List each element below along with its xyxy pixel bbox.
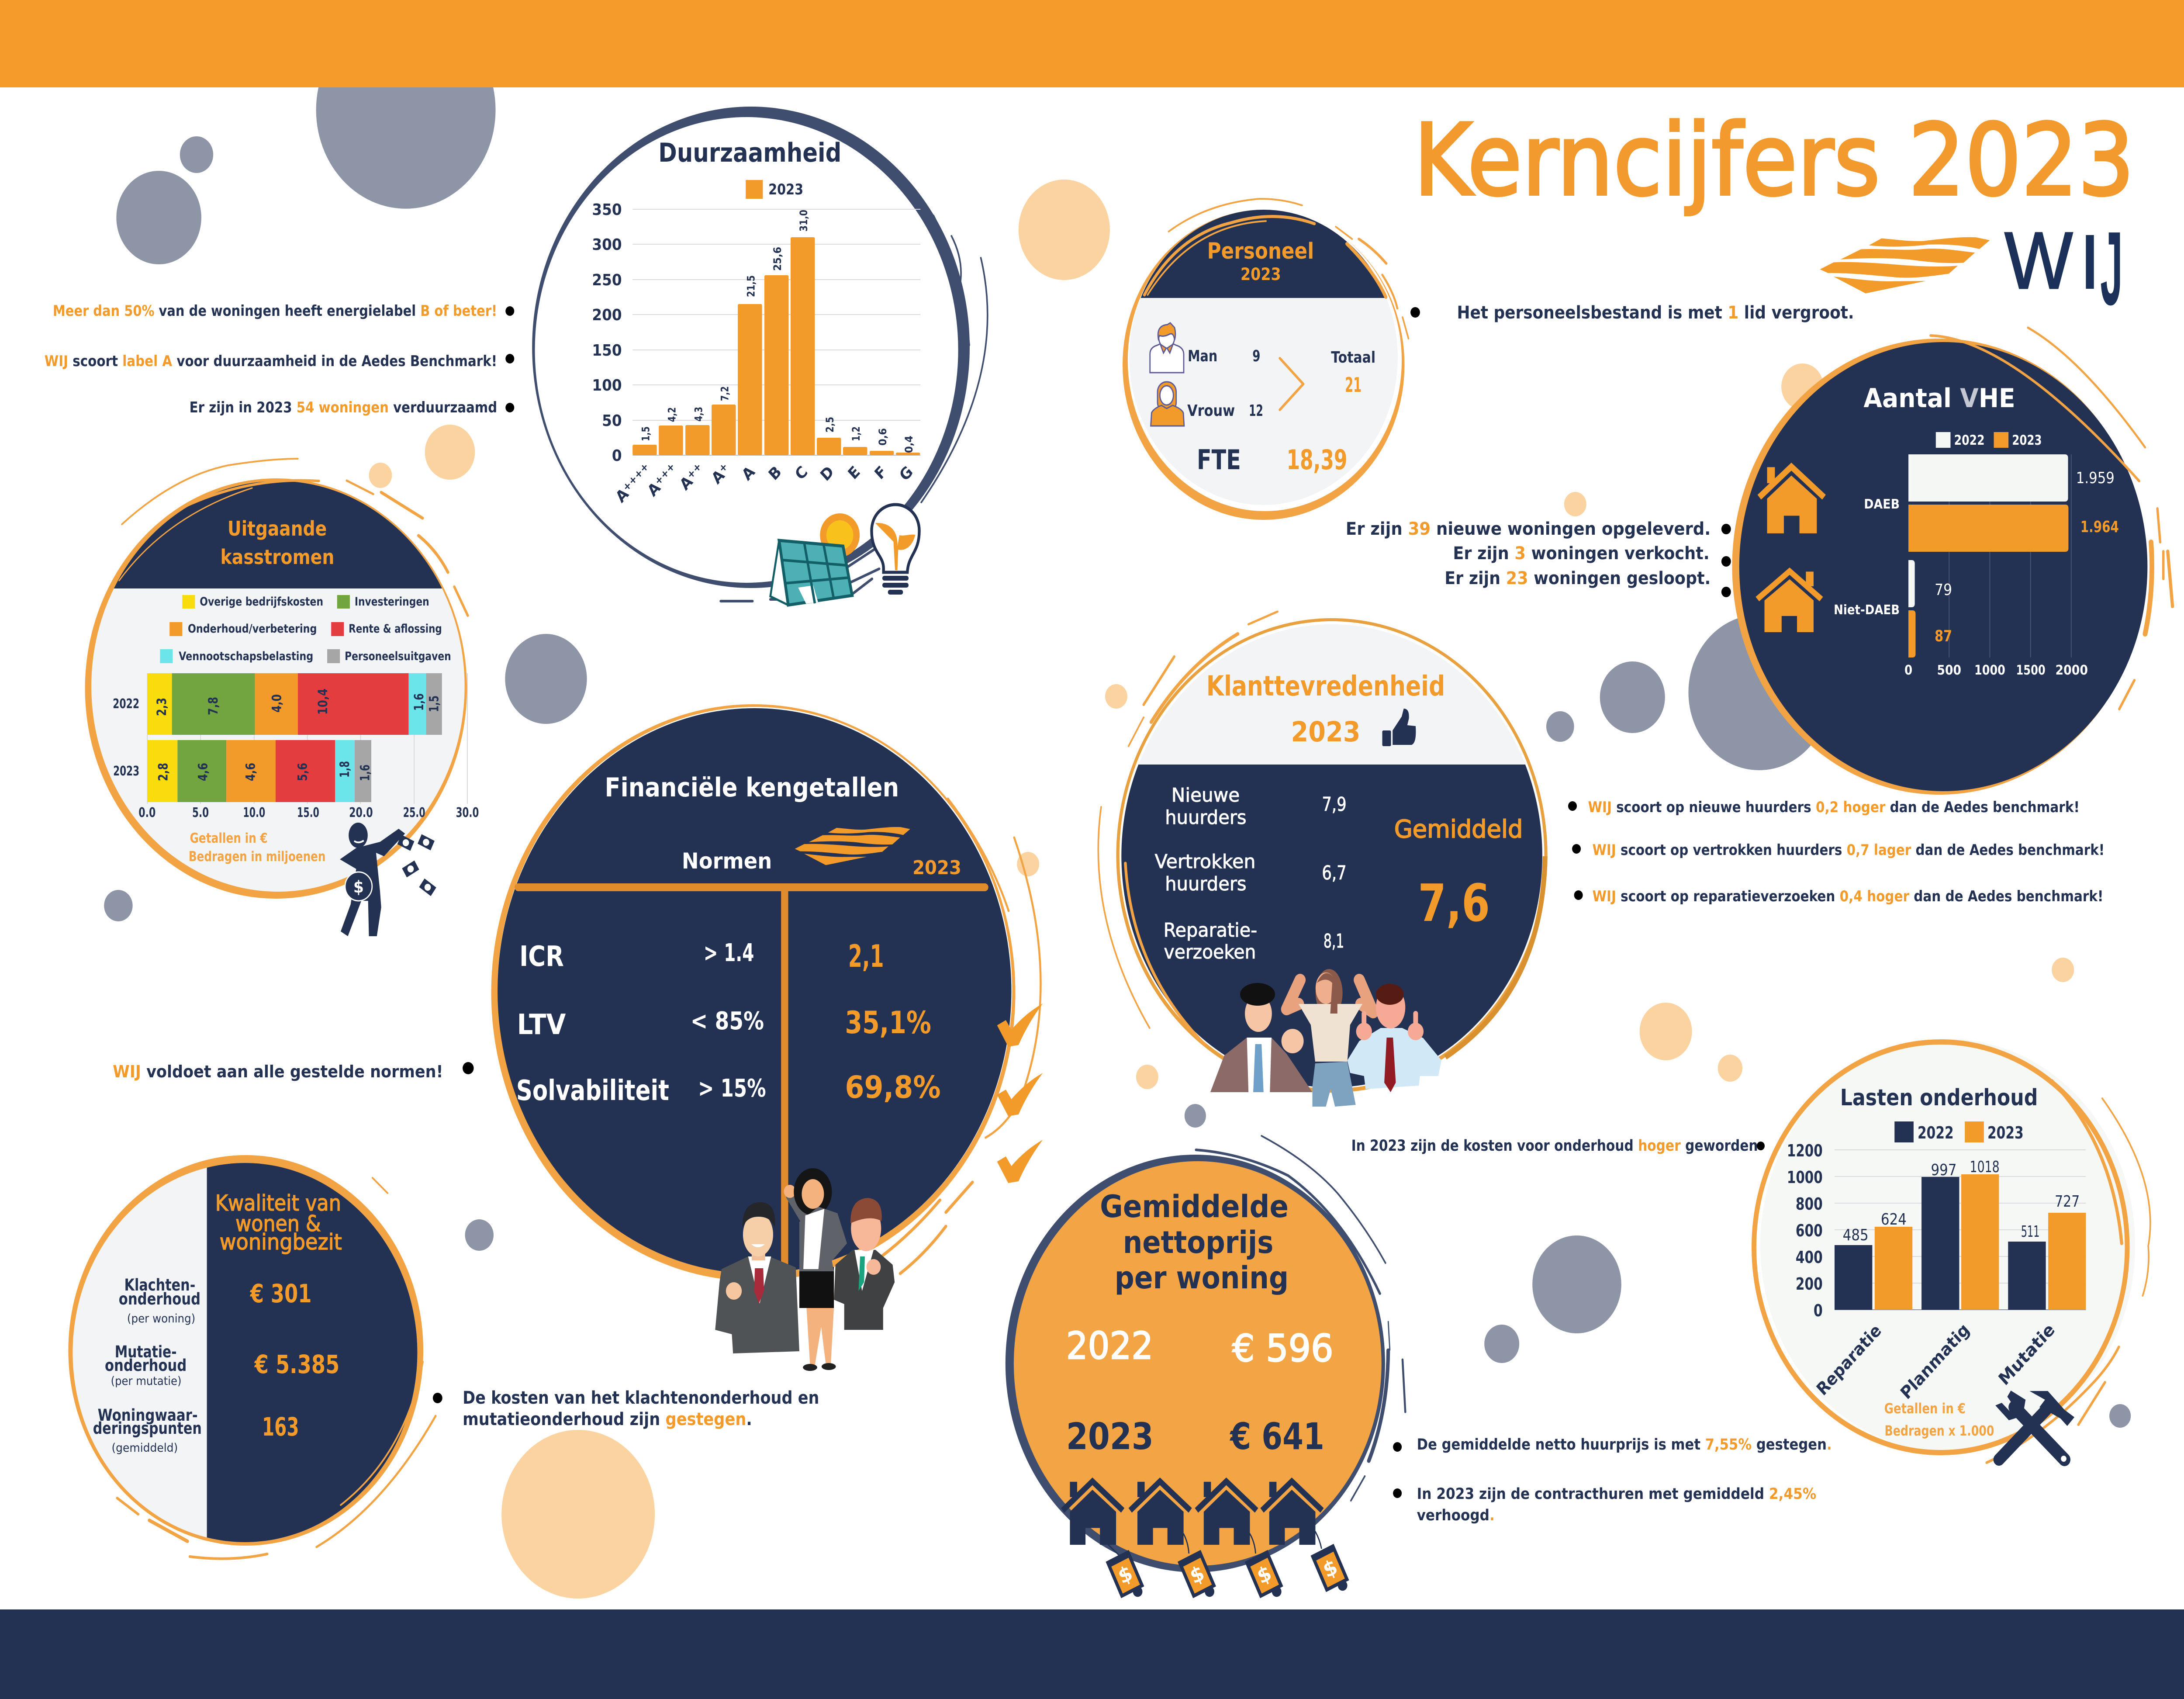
note: units: Bedragen x 1.000 — [1885, 1423, 1994, 1439]
text block: normen: WIJ voldoet aan alle gestelde normen! — [113, 1062, 443, 1081]
heading: Gemiddelde nettoprijs per woning — [1100, 1189, 1289, 1296]
bar chart: energielabels: 300 — [592, 236, 622, 254]
row: mutatieonderhoud — [105, 1343, 339, 1388]
scores table: huurders — [1165, 872, 1247, 895]
icon: solar panel with sun — [771, 513, 860, 605]
legend: 2023 — [1987, 1123, 2024, 1142]
heading: Klanttevredenheid 2023: Klanttevredenheid — [1206, 670, 1445, 702]
icon: house DAEB — [1758, 463, 1826, 533]
bar chart: lasten onderhoud: 1000 — [1787, 1167, 1823, 1187]
note: units: Getallen in € — [1884, 1401, 1966, 1417]
text block: huurprijs: In 2023 zijn de contracthuren met gemiddeld 2,45% — [1417, 1485, 1816, 1502]
stacked bar chart: 10.0 — [243, 805, 265, 820]
bar chart: lasten onderhoud: 485 — [1843, 1226, 1869, 1244]
icon: wrench and hammer — [1995, 1391, 2074, 1462]
bar chart: energielabels: A — [739, 463, 758, 484]
bar chart: energielabels: 21,5 — [745, 275, 757, 297]
text block: onderhoudskosten — [433, 1388, 819, 1429]
heading: Kwaliteit van wonen en woningbezit: Kwaliteit van — [215, 1191, 341, 1216]
panel: Uitgaande kasstromen — [79, 459, 479, 936]
row: klachtenonderhoud — [119, 1276, 312, 1325]
icon: person throwing money — [340, 823, 436, 936]
title: Kerncijfers 2023 — [1413, 103, 2134, 218]
FTE figure: FTE — [1197, 444, 1241, 476]
stacked bar chart: 1,5 — [427, 696, 442, 712]
panel: Financiële kengetallen — [491, 704, 1043, 1371]
bar chart: lasten onderhoud: 511 — [2021, 1223, 2040, 1241]
bar chart: VHE: 500 — [1937, 662, 1961, 678]
text block: personeel: Het personeelsbestand is met 1 lid vergroot. — [1457, 303, 1854, 323]
row: ICR: ICR — [519, 940, 564, 973]
stacked bar chart: 0.0 — [138, 805, 156, 820]
text block: klanttevredenheid — [1568, 799, 2105, 905]
row: klachtenonderhoud: € 301 — [249, 1280, 312, 1309]
bar chart: energielabels: A — [612, 485, 632, 506]
scores table — [1155, 784, 1347, 963]
WIJ logo — [1820, 214, 2122, 324]
legend — [1894, 1121, 2024, 1142]
staff counts — [1187, 347, 1375, 420]
text block: lasten onderhoud: In 2023 zijn de kosten voor onderhoud hoger geworden — [1351, 1137, 1758, 1154]
row: 2022: 2022 — [1066, 1325, 1153, 1368]
icon: houses with price tags: $ — [1254, 1560, 1275, 1589]
bar chart: lasten onderhoud: 0 — [1814, 1301, 1823, 1320]
bar chart: energielabels: F — [871, 463, 890, 483]
heading: Uitgaande kasstromen — [221, 517, 334, 569]
scores table: huurders — [1165, 806, 1247, 828]
row: LTV: < 85% — [691, 1007, 764, 1035]
bar chart: energielabels: 1,5 — [639, 426, 652, 441]
bar chart: energielabels: 31,0 — [798, 210, 810, 232]
bar chart: energielabels: A — [708, 466, 728, 488]
bar chart: energielabels: 2,5 — [824, 417, 836, 433]
text block: woningen: Er zijn 39 nieuwe woningen opgeleverd. — [1346, 519, 1711, 539]
row: woningwaarderingspunten — [93, 1406, 299, 1455]
staff counts: Man — [1188, 347, 1217, 365]
stacked bar chart: 7,8 — [206, 697, 221, 715]
scores table: 7,9 — [1322, 793, 1347, 815]
row: 2023: € 641 — [1230, 1415, 1324, 1458]
bar chart: energielabels: +++ — [653, 460, 677, 488]
total 21: 21 — [1345, 374, 1362, 397]
bar chart: energielabels — [592, 201, 920, 506]
stacked bar chart: 2022 — [113, 696, 139, 711]
row: woningwaarderingspunten: 163 — [262, 1413, 299, 1442]
note: units: Bedragen in miljoenen — [189, 849, 325, 864]
legend: Overige bedrijfskosten — [200, 595, 323, 609]
heading: Kwaliteit van wonen en woningbezit: wonen & — [235, 1211, 321, 1237]
bar chart: lasten onderhoud: 727 — [2055, 1193, 2080, 1211]
bar chart: lasten onderhoud: Mutatie — [1995, 1320, 2059, 1390]
bar chart: lasten onderhoud: Reparatie — [1813, 1321, 1885, 1400]
row: 2022 — [1066, 1325, 1334, 1370]
panel: Klanttevredenheid — [1098, 612, 1553, 1107]
heading: Kwaliteit van wonen en woningbezit — [215, 1191, 342, 1255]
row: Solvabiliteit — [516, 1069, 941, 1107]
bar chart: energielabels: 250 — [592, 271, 622, 289]
row: LTV: 35,1% — [845, 1005, 931, 1041]
icon: houses with price tags: $ — [1319, 1554, 1341, 1583]
table header: Normen — [682, 849, 772, 874]
stacked bar chart: 1,6 — [412, 693, 427, 711]
icon: woman — [1151, 382, 1184, 426]
bar chart: lasten onderhoud: 400 — [1796, 1247, 1823, 1267]
bar chart: VHE: 1500 — [2016, 662, 2046, 678]
staff counts: 12 — [1249, 402, 1263, 420]
text block: duurzaamheid: Meer dan 50% van de woningen heeft energielabel B of beter! — [53, 302, 497, 319]
staff counts: 9 — [1252, 347, 1260, 365]
text block: klanttevredenheid: WIJ scoort op reparatieverzoeken 0,4 hoger dan de Aedes benchmark! — [1592, 888, 2103, 905]
note: units: Getallen in € — [190, 830, 268, 846]
note: units — [189, 830, 325, 864]
stacked bar chart: 1,6 — [358, 765, 373, 781]
row: mutatieonderhoud: (per mutatie) — [111, 1374, 181, 1388]
row: mutatieonderhoud: € 5.385 — [254, 1350, 339, 1380]
heading: Personeel 2023 — [1207, 239, 1314, 284]
row: Solvabiliteit: 69,8% — [845, 1069, 941, 1105]
row: LTV — [517, 1005, 931, 1041]
scores table: 6,7 — [1322, 862, 1347, 884]
WIJ logo: W — [2004, 216, 2073, 306]
bar chart: lasten onderhoud: 200 — [1796, 1274, 1823, 1294]
text block: duurzaamheid — [45, 302, 514, 416]
heading: Financiële kengetallen: Financiële kengetallen — [605, 772, 899, 803]
table header: 2023 — [912, 856, 961, 879]
WIJ logo: I — [2080, 220, 2099, 305]
row: mutatieonderhoud: Mutatie- — [115, 1343, 177, 1361]
bar chart: lasten onderhoud: 1200 — [1787, 1141, 1823, 1160]
panel: Aantal VHE — [1732, 328, 2173, 795]
bar chart: lasten onderhoud: 800 — [1796, 1194, 1823, 1214]
top banner — [0, 0, 2184, 87]
icon: house Niet-DAEB — [1755, 567, 1823, 632]
stacked bar chart: 1,8 — [338, 761, 352, 778]
bar chart: VHE: DAEB — [1864, 496, 1900, 512]
text block: klanttevredenheid: WIJ scoort op vertrokken huurders 0,7 lager dan de Aedes benchmark! — [1592, 841, 2105, 858]
legend: Personeelsuitgaven — [345, 650, 451, 663]
heading: Lasten onderhoud: Lasten onderhoud — [1840, 1084, 2038, 1111]
legend — [1936, 432, 2042, 448]
stacked bar chart: 5.0 — [192, 805, 209, 820]
bar chart: energielabels: 1,2 — [850, 426, 862, 441]
stacked bar chart: 2023 — [113, 763, 139, 779]
table header — [682, 827, 961, 879]
bar chart: energielabels: 0,6 — [877, 428, 889, 446]
row: mutatieonderhoud: onderhoud — [105, 1356, 187, 1375]
bar chart: VHE: 2000 — [2055, 662, 2088, 678]
row: 2023: 2023 — [1066, 1415, 1154, 1458]
bar chart: energielabels: 4,2 — [666, 407, 678, 422]
stacked bar chart: 2,3 — [155, 698, 169, 716]
stacked bar chart: 10,4 — [316, 689, 331, 715]
legend: Rente & aflossing — [349, 622, 442, 636]
heading: Aantal VHE: Aantal VHE — [1863, 383, 2015, 414]
bar chart: energielabels: + — [717, 460, 730, 475]
scores table: Vertrokken — [1155, 850, 1256, 872]
heading: Gemiddelde nettoprijs per woning: nettoprijs — [1123, 1225, 1273, 1260]
row: klachtenonderhoud: onderhoud — [119, 1290, 200, 1308]
heading: Klanttevredenheid 2023 — [1206, 670, 1445, 748]
scores table: Reparatie- — [1164, 919, 1257, 941]
heading: Uitgaande kasstromen: kasstromen — [221, 546, 334, 569]
bar chart: energielabels: D — [817, 463, 837, 485]
FTE figure: 18,39 — [1286, 444, 1348, 476]
bar chart: VHE: Niet-DAEB — [1834, 602, 1900, 617]
scores table: Nieuwe — [1171, 784, 1240, 806]
row: klachtenonderhoud: (per woning) — [127, 1312, 195, 1325]
heading: Personeel 2023: 2023 — [1241, 264, 1281, 284]
legend — [746, 180, 803, 199]
bar chart: energielabels: ++ — [685, 460, 704, 481]
text block: onderhoudskosten: mutatieonderhoud zijn gestegen. — [463, 1409, 752, 1429]
bar chart: energielabels: E — [845, 463, 864, 483]
stacked bar chart — [113, 673, 479, 820]
stacked bar chart: 30.0 — [456, 805, 479, 820]
panel: Gemiddelde nettoprijs per woning — [1006, 1136, 1405, 1605]
stacked bar chart: 15.0 — [297, 805, 319, 820]
row: ICR — [519, 938, 884, 974]
legend: 2023 — [2012, 433, 2042, 448]
bar chart: VHE: 79 — [1935, 581, 1952, 599]
row: Solvabiliteit: Solvabiliteit — [516, 1074, 669, 1107]
text block: woningen: Er zijn 3 woningen verkocht. — [1453, 543, 1710, 564]
legend — [160, 595, 451, 663]
average score: 7,6 — [1418, 873, 1490, 933]
bar chart: lasten onderhoud: Planmatig — [1897, 1320, 1973, 1403]
bar chart: energielabels: 50 — [602, 412, 622, 430]
bar chart: lasten onderhoud: 997 — [1931, 1161, 1957, 1179]
bar chart: energielabels: A — [677, 472, 696, 494]
text block: huurprijs: verhoogd. — [1417, 1506, 1495, 1524]
text block: huurprijs — [1393, 1436, 1832, 1524]
text block: duurzaamheid: WIJ scoort label A voor duurzaamheid in de Aedes Benchmark! — [45, 353, 497, 370]
legend: 2022 — [1954, 433, 1985, 448]
average score: Gemiddeld — [1394, 815, 1523, 844]
bar chart: energielabels: ++++ — [621, 460, 651, 494]
row: woningwaarderingspunten: deringspunten — [93, 1419, 202, 1438]
legend: 2022 — [1918, 1123, 1954, 1142]
heading: Kwaliteit van wonen en woningbezit: woningbezit — [220, 1230, 342, 1255]
stacked bar chart: 4,6 — [196, 763, 211, 781]
panel: Personeel — [1123, 199, 1409, 520]
icon: light bulb with plant — [871, 505, 919, 595]
icon: houses with price tags — [1061, 1478, 1352, 1605]
row: ICR: > 1.4 — [704, 938, 754, 967]
WIJ logo: J — [2101, 214, 2122, 324]
illustration: happy tenants — [1210, 969, 1441, 1107]
bar chart: energielabels: B — [765, 463, 785, 484]
stacked bar chart: 4,0 — [270, 694, 284, 713]
panel: Duurzaamheid — [532, 107, 988, 605]
bar chart: energielabels: G — [896, 463, 916, 485]
row: woningwaarderingspunten: (gemiddeld) — [111, 1441, 178, 1455]
row: woningwaarderingspunten: Woningwaar- — [98, 1406, 198, 1425]
heading: Gemiddelde nettoprijs per woning: Gemiddelde — [1100, 1189, 1289, 1225]
legend: Onderhoud/verbetering — [188, 622, 317, 636]
icon: thumbs up — [1382, 709, 1416, 746]
bar chart: VHE: 1000 — [1974, 662, 2005, 678]
staff counts: Totaal — [1331, 349, 1375, 367]
text block: onderhoudskosten: De kosten van het klachtenonderhoud en — [463, 1388, 819, 1408]
text block: woningen — [1346, 519, 1731, 597]
bar chart: lasten onderhoud: 600 — [1796, 1221, 1823, 1240]
row: 2023 — [1066, 1415, 1324, 1458]
stacked bar chart: 25.0 — [403, 805, 425, 820]
bar chart: lasten onderhoud: 1018 — [1970, 1158, 2000, 1176]
scores table: 8,1 — [1324, 930, 1344, 952]
legend: 2023 — [768, 181, 803, 198]
row: Solvabiliteit: > 15% — [698, 1074, 766, 1103]
bar chart: energielabels: 4,3 — [692, 407, 705, 422]
average score — [1394, 815, 1523, 933]
heading: Personeel 2023: Personeel — [1207, 239, 1314, 264]
heading: Klanttevredenheid 2023: 2023 — [1291, 716, 1361, 748]
heading: Gemiddelde nettoprijs per woning: per woning — [1115, 1260, 1289, 1296]
bottom banner — [0, 1609, 2184, 1699]
bar chart: VHE: 87 — [1935, 627, 1952, 645]
stacked bar chart: 5,6 — [296, 763, 310, 781]
text block: duurzaamheid: Er zijn in 2023 54 woningen verduurzaamd — [190, 399, 497, 416]
panel: Kwaliteit van wonen en woningbezit — [68, 1153, 435, 1559]
legend: Vennootschapsbelasting — [179, 650, 313, 663]
bar chart: energielabels: 150 — [592, 342, 622, 360]
icon: houses with price tags: $ — [1114, 1560, 1136, 1589]
bar chart: energielabels: 25,6 — [771, 247, 784, 271]
FTE figure — [1197, 444, 1348, 476]
text block: huurprijs: De gemiddelde netto huurprijs is met 7,55% gestegen. — [1417, 1436, 1832, 1453]
bar chart: VHE — [1834, 454, 2119, 678]
illustration: three business people — [715, 1168, 895, 1371]
icon: houses with price tags: $ — [1186, 1560, 1208, 1589]
bar chart: energielabels: C — [792, 463, 811, 484]
staff counts: Vrouw — [1187, 402, 1235, 420]
legend: Investeringen — [355, 595, 429, 609]
icon: man — [1150, 323, 1184, 373]
heading: Uitgaande kasstromen: Uitgaande — [228, 517, 327, 541]
scores table: verzoeken — [1164, 941, 1256, 963]
bar chart: energielabels: A — [644, 479, 664, 500]
text block: woningen: Er zijn 23 woningen gesloopt. — [1444, 568, 1711, 588]
row: klachtenonderhoud: Klachten- — [124, 1276, 195, 1294]
bar chart: lasten onderhoud: 624 — [1881, 1211, 1907, 1228]
bar chart: energielabels: 0 — [612, 447, 622, 465]
bar chart: energielabels: 0,4 — [903, 436, 915, 453]
bar chart: energielabels: 350 — [592, 201, 622, 219]
icon: person throwing money: $ — [353, 877, 364, 896]
icon: check marks — [997, 1003, 1043, 1183]
row: 2022: € 596 — [1232, 1327, 1334, 1370]
row: ICR: 2,1 — [848, 938, 884, 974]
bar chart: lasten onderhoud — [1787, 1141, 2086, 1403]
arrow: chevron to total — [1280, 358, 1303, 410]
bar chart: VHE: 0 — [1904, 662, 1912, 678]
bar chart: energielabels: 7,2 — [719, 386, 731, 401]
bar chart: VHE: 1.959 — [2076, 469, 2115, 487]
bar chart: energielabels: 100 — [592, 377, 622, 394]
stacked bar chart: 4,6 — [244, 763, 258, 781]
bar chart: energielabels: 200 — [592, 306, 622, 324]
stacked bar chart: 2,8 — [156, 763, 171, 781]
table rules — [515, 883, 988, 1267]
row: LTV: LTV — [517, 1008, 566, 1041]
panel: Lasten onderhoud — [1754, 1039, 2150, 1463]
stacked bar chart: 20.0 — [349, 805, 373, 820]
bar chart: VHE: 1.964 — [2080, 518, 2119, 536]
text block: klanttevredenheid: WIJ scoort op nieuwe huurders 0,2 hoger dan de Aedes benchmark! — [1588, 799, 2080, 816]
note: units — [1884, 1401, 1994, 1439]
heading: Duurzaamheid: Duurzaamheid — [658, 138, 841, 168]
